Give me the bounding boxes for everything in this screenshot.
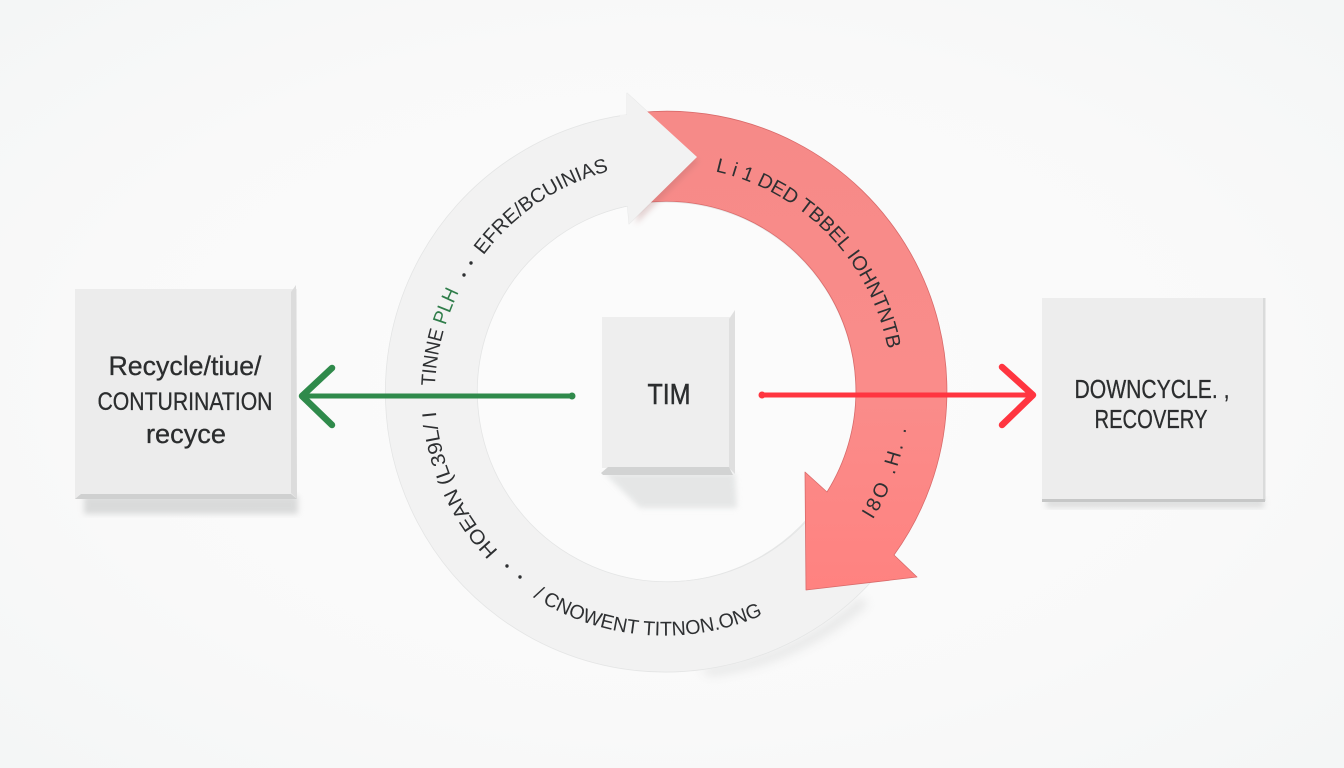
right box text: RECOVERY: [1094, 404, 1208, 434]
white arc label: time: TINNE PLH: [421, 287, 458, 385]
left box text: Recycle/tiue/: [108, 351, 262, 381]
white arrow head: [620, 93, 699, 224]
right box: downcycle: [1042, 298, 1266, 508]
arc soft shadow: [700, 597, 868, 676]
left box: recycle: [75, 285, 298, 514]
white arc label: lower left: HOEAN (L39L/ I: [422, 413, 497, 559]
green arrow to recycle: [302, 368, 576, 425]
right box text: DOWNCYCLE. ,: [1074, 374, 1230, 404]
white arc separator dots upper: [462, 261, 473, 277]
white arc separator dots lower: [505, 564, 522, 579]
red arc upper label: L i 1 DED TBBEL IOHNTNTB: [716, 158, 900, 348]
white arc label: upper: EFRE/BCUINIAS: [474, 159, 608, 254]
inner circle emboss: [476, 202, 856, 582]
left box text: CONTURINATION: [98, 388, 272, 416]
left box text: recyce: [146, 419, 226, 449]
red arc arrow: [647, 110, 948, 590]
white arc arrow body: [385, 92, 870, 672]
left box text: [98, 351, 272, 449]
red arc lower label: I8O .H. .: [862, 430, 906, 518]
center box text: TIM: [648, 379, 690, 411]
red arrow to downcycle: [758, 367, 1033, 425]
circular cycle diagram: [385, 92, 948, 676]
right box text: [1074, 374, 1230, 434]
white arc label: bottom: / CNOWENT TITNON.ONG: [533, 586, 761, 636]
center box: TIM: [601, 310, 737, 508]
